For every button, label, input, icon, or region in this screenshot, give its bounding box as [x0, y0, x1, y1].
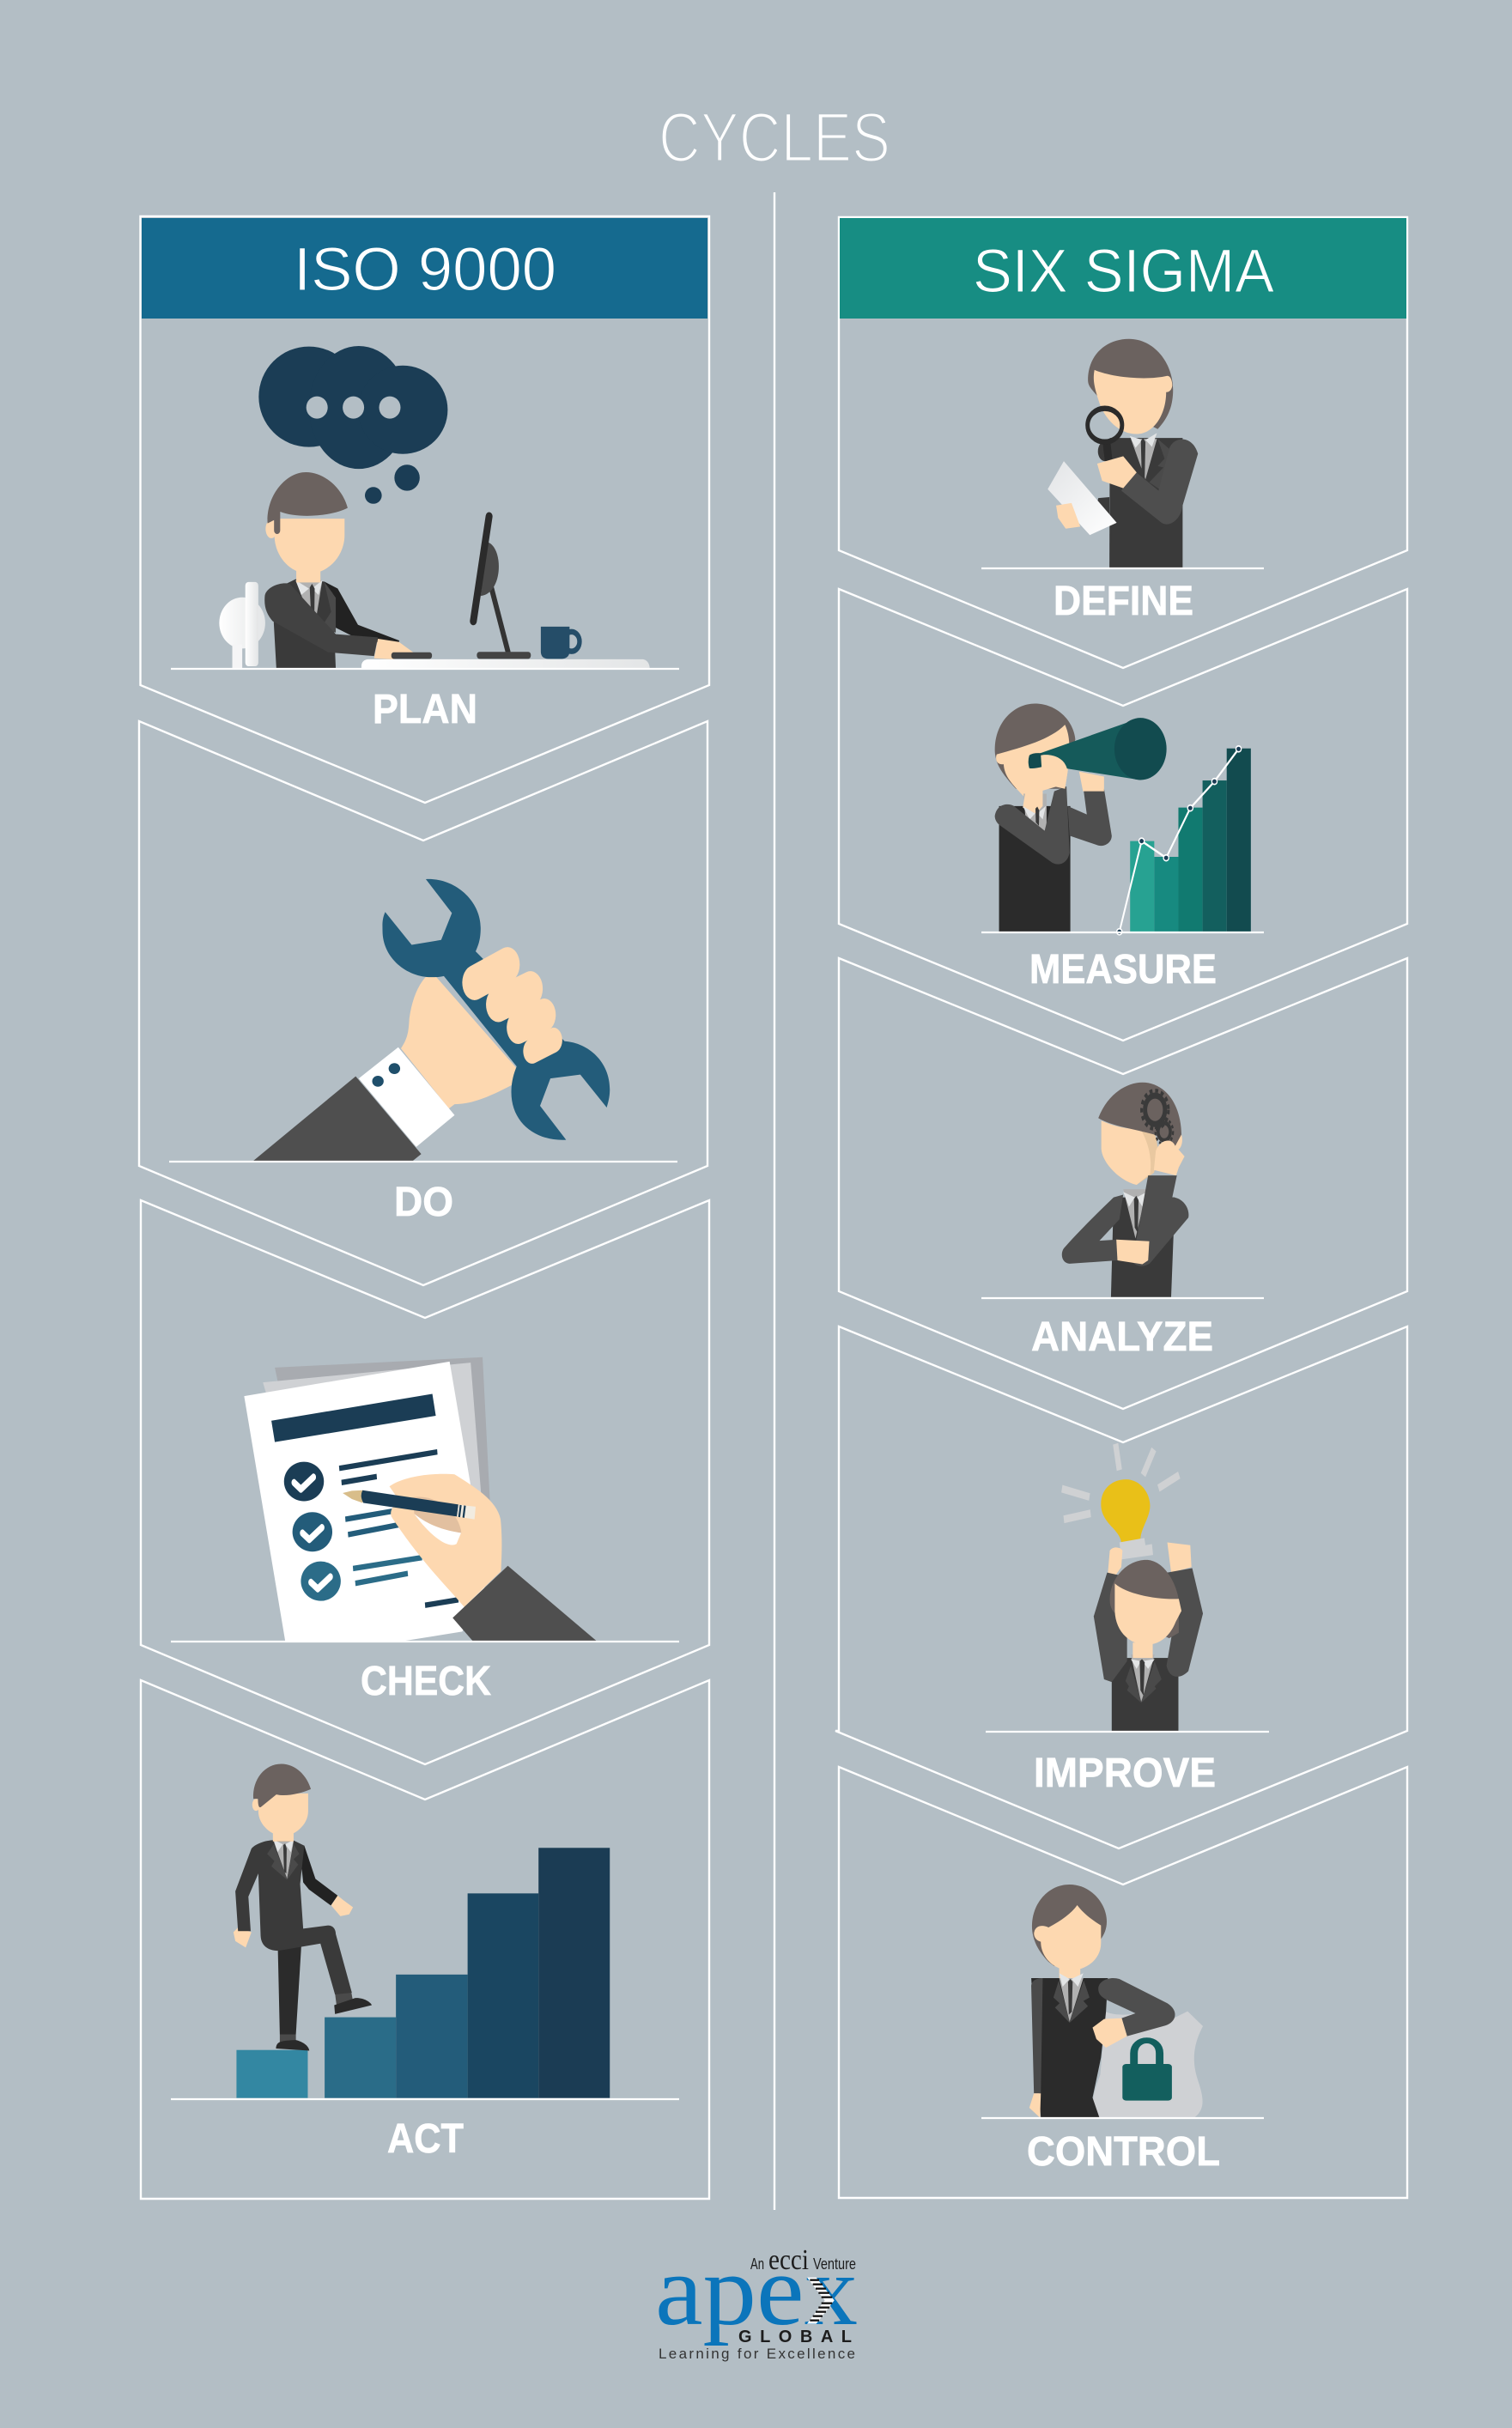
- panel: plan: [141, 216, 709, 803]
- panel: check: [141, 1200, 709, 1764]
- baseline rule: [171, 668, 679, 670]
- label: ANALYZE: ANALYZE: [1031, 1314, 1213, 1360]
- baseline rule: [171, 2098, 679, 2100]
- baseline rule: [981, 1297, 1264, 1299]
- illustration: man climbing rising bars: [234, 1763, 610, 2098]
- label: CHECK: CHECK: [361, 1659, 491, 1704]
- panel: act: [141, 1680, 709, 2199]
- baseline rule: [981, 932, 1264, 933]
- illustration: hand ticking a checklist: [244, 1357, 597, 1641]
- logo tagline: an ecci venture: [750, 2244, 856, 2276]
- illustration: man with magnifying glass and paper: [1047, 339, 1198, 568]
- label: ACT: ACT: [387, 2116, 464, 2162]
- panel: do: [139, 721, 707, 1285]
- panel outline: check: [141, 1200, 709, 1764]
- illustration: man holding a glowing light bulb: [1062, 1444, 1203, 1732]
- panel: improve: [835, 1326, 1407, 1848]
- panel: define: [839, 217, 1407, 668]
- label: DEFINE: DEFINE: [1054, 579, 1193, 624]
- logo text: global: GLOBAL: [738, 2328, 852, 2346]
- panel outline: act: [141, 1680, 709, 2199]
- label: IMPROVE: IMPROVE: [1034, 1751, 1216, 1796]
- logo tagline: an ecci venture: An: [750, 2255, 764, 2273]
- baseline rule: [169, 1161, 677, 1162]
- illustration: hand gripping a wrench: [252, 879, 610, 1162]
- illustration: man thinking with gears in his head: [1062, 1083, 1188, 1297]
- logo wordmark: apex: apex: [655, 2234, 858, 2346]
- header bar: ISO 9000: ISO 9000: [294, 236, 556, 304]
- baseline rule: [171, 1641, 679, 1642]
- panel outline: analyze: [839, 958, 1407, 1409]
- illustration: woman leaning on a padlock shield: [1029, 1885, 1203, 2118]
- baseline rule: [986, 1731, 1269, 1733]
- panel outline: measure: [839, 589, 1407, 1041]
- logo: apex global: [655, 2234, 858, 2362]
- logo stripes: [807, 2278, 835, 2324]
- logo tagline: an ecci venture: ecci: [768, 2244, 809, 2276]
- illustration: man with telescope and rising chart: [995, 703, 1251, 935]
- panel outline: control: [839, 1767, 1407, 2198]
- title: CYCLES: [659, 99, 890, 177]
- panel outline: improve: [835, 1326, 1407, 1848]
- baseline rule: [981, 2117, 1264, 2119]
- label: CONTROL: CONTROL: [1027, 2129, 1220, 2175]
- header bar: SIX SIGMA: SIX SIGMA: [973, 238, 1275, 306]
- panel outline: plan: [141, 216, 709, 803]
- panel: measure: [839, 589, 1407, 1041]
- header bar: ISO 9000: [142, 218, 707, 319]
- logo tagline: an ecci venture: Venture: [813, 2255, 856, 2273]
- label: PLAN: PLAN: [373, 687, 477, 732]
- baseline rule: [981, 568, 1264, 569]
- column divider: [774, 192, 775, 2210]
- panel outline: do: [139, 721, 707, 1285]
- label: DO: DO: [394, 1180, 453, 1225]
- logo text: learning for excellence: Learning for Excellence: [659, 2346, 855, 2362]
- panel: analyze: [839, 958, 1407, 1409]
- label: MEASURE: MEASURE: [1029, 947, 1217, 992]
- panel: control: [839, 1767, 1407, 2198]
- illustration: man thinking at a desk: [219, 346, 650, 669]
- panel outline: define: [839, 217, 1407, 668]
- header bar: SIX SIGMA: [840, 218, 1406, 319]
